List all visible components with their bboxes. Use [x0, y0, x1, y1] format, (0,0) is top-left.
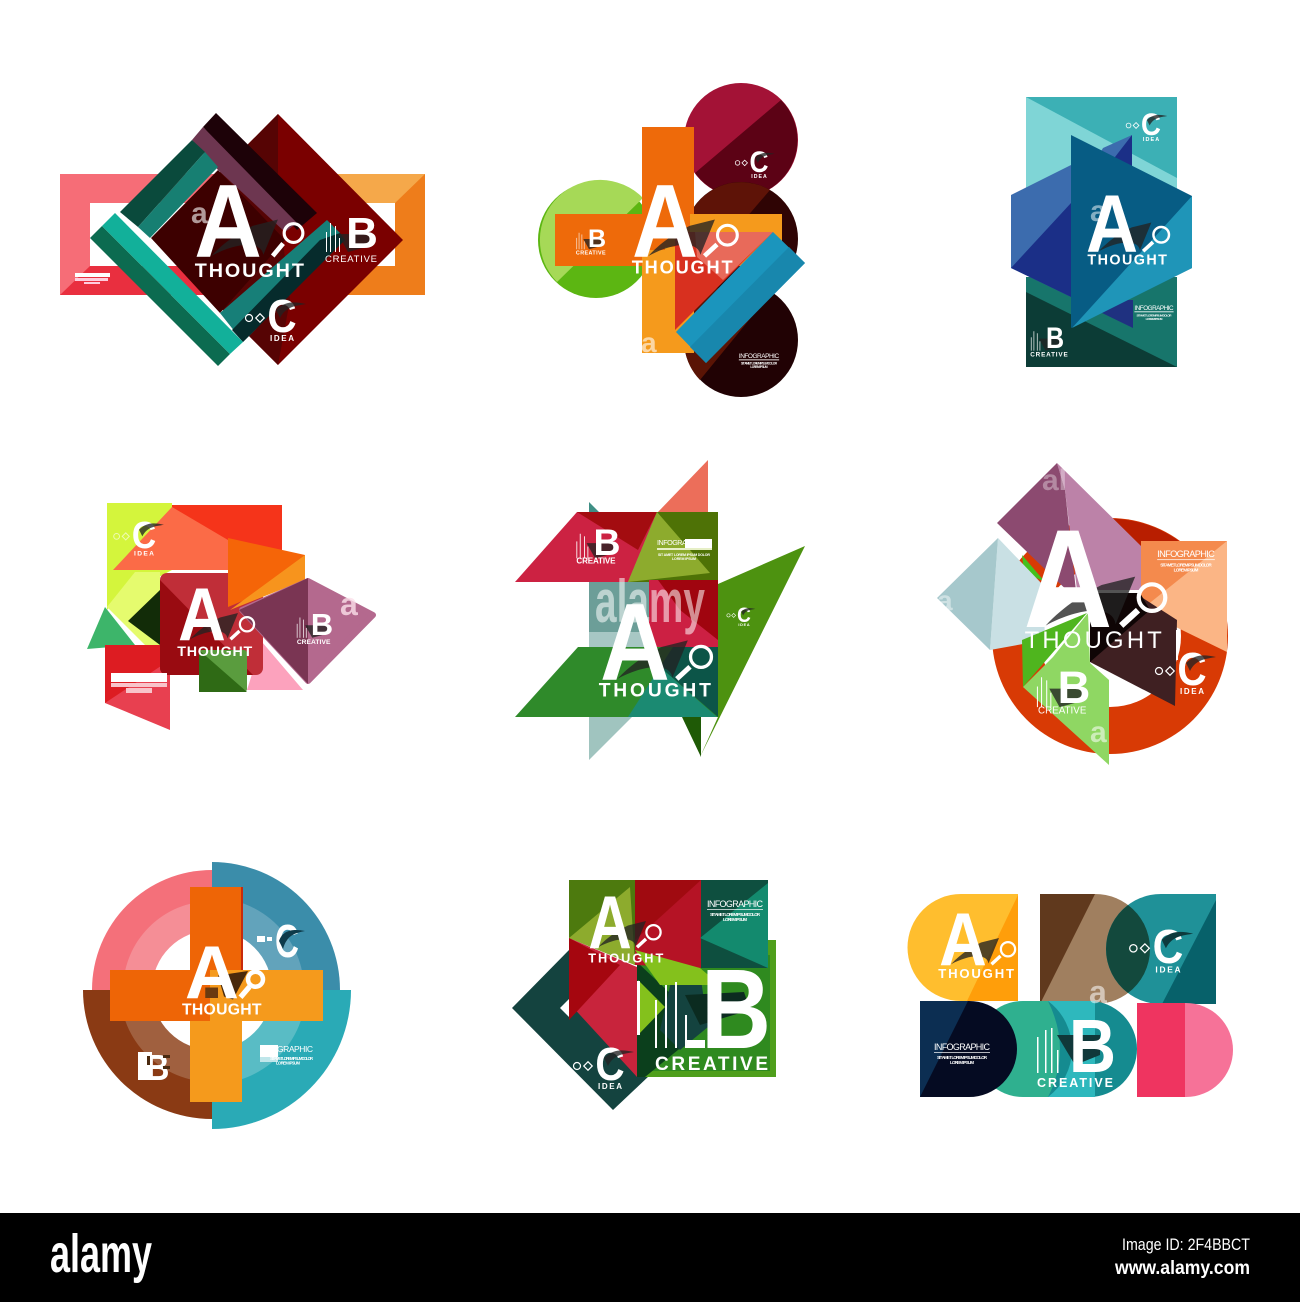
infographic text block: SIT AMET LOREM IPSUM DOLOR: [741, 361, 778, 365]
letter B with creative label: B: [588, 225, 606, 253]
letter C with idea label: IDEA: [1143, 137, 1159, 143]
white notch: [560, 999, 569, 1017]
letter C with idea label: [114, 513, 164, 557]
letter A with thought label: [588, 882, 663, 965]
infographic text block: INFOGRAPHIC: [707, 899, 764, 909]
navy tab: [920, 1001, 1017, 1097]
teal blue tab: [1048, 1001, 1137, 1097]
dark teal facet: [660, 647, 718, 717]
letter B with creative label: CREATIVE: [655, 1054, 768, 1075]
letter C with idea label: C: [1141, 107, 1161, 142]
top circle: [684, 83, 798, 197]
grey teal block: [589, 582, 649, 647]
letter A with thought label: THOUGHT: [938, 966, 1014, 981]
letter B with creative label: [1037, 662, 1090, 716]
infographic text block: [1157, 549, 1215, 572]
panel: mixed rounded shapes infographic: [87, 503, 373, 730]
infographic text block: LOREM IPSUM: [750, 365, 768, 369]
letter A with thought label: [599, 580, 711, 703]
letter B with creative label: B: [346, 209, 378, 258]
olive cell: [569, 880, 635, 965]
peach panel: [1141, 541, 1227, 652]
back small triangles: [1090, 135, 1133, 328]
letter B with creative label: CREATIVE: [576, 250, 606, 256]
brown tab: [1040, 894, 1150, 1004]
pink tab: [1137, 1003, 1233, 1097]
letter C with idea label: IDEA: [134, 550, 154, 557]
letter C with idea label: IDEA: [1155, 964, 1181, 974]
letter C with idea label: IDEA: [270, 334, 294, 343]
infographic text block: SIT AMET LOREM IPSUM DOLOR: [1160, 562, 1212, 567]
brown quadrant: [83, 990, 212, 1119]
pale blue diamond: [937, 538, 1045, 650]
letter B with creative label: [325, 209, 378, 265]
dark brown panel: [1090, 593, 1177, 706]
letter A with thought label: [177, 572, 254, 660]
letter C with idea label: C: [737, 604, 751, 627]
panel: rounded tabs infographic: [907, 894, 1233, 1097]
coral quadrant: [92, 870, 212, 990]
dark diamond frame: [512, 950, 650, 1110]
lime block: [107, 503, 172, 645]
letter A with thought label: A: [185, 930, 239, 1014]
infographic text block: LOREM IPSUM: [950, 1060, 974, 1065]
watermark letter: a: [641, 327, 657, 358]
panel: square diamonds infographic: [60, 113, 425, 366]
letter A with thought label: A: [632, 163, 698, 279]
yellow tab: [907, 894, 1018, 1001]
green lower block: [637, 940, 776, 1077]
letter C with idea label: [246, 292, 306, 343]
letter A with thought label: A: [600, 580, 670, 703]
purple diamond: [997, 463, 1141, 600]
top teal block: [1026, 97, 1177, 207]
purple rounded diamond: [239, 578, 373, 684]
small teal triangle: [589, 502, 599, 512]
letter C with idea label: IDEA: [598, 1082, 622, 1091]
red triangle: [675, 232, 773, 330]
infographic text block: SIT AMET LOREM IPSUM DOLOR: [937, 1055, 988, 1060]
letter C with idea label: C: [595, 1040, 625, 1091]
infographic text block: INFOGRAPHIC: [739, 353, 779, 360]
letter A with thought label: [1086, 179, 1169, 270]
orange rounded triangle: [228, 538, 305, 610]
letter B with creative label: [576, 521, 621, 566]
letter B with creative label: CREATIVE: [1038, 705, 1087, 716]
letter C with idea label: IDEA: [1180, 687, 1204, 696]
letter C with idea label: C: [1153, 919, 1183, 974]
letter B with creative label: [655, 946, 771, 1075]
panel: triangles and arrows infographic: [515, 460, 805, 760]
green tab: [975, 1001, 1072, 1097]
letter A with thought label: A: [939, 897, 987, 981]
panel: ring and diamonds infographic: [937, 463, 1228, 765]
main triangle: [1071, 135, 1192, 328]
infographic text block: LOREM IPSUM: [1146, 317, 1163, 321]
infographic text block: [260, 1044, 313, 1066]
middle circle: [684, 182, 798, 296]
white gap sliver: [1176, 630, 1178, 660]
letter B with creative label: [576, 225, 606, 256]
watermark letter: a: [191, 197, 208, 230]
infographic text block: SIT AMET LOREM IPSUM DOLOR: [1137, 313, 1172, 317]
orange cross: [555, 127, 782, 353]
letter A with thought label: [182, 930, 263, 1018]
infographic text block: [707, 899, 764, 922]
letter A with thought label: [1024, 501, 1165, 657]
red lower block: [105, 645, 170, 730]
website address: www.alamy.com: [1114, 1258, 1250, 1279]
letter B with creative label: [1037, 1004, 1116, 1090]
letter C with idea label: IDEA: [751, 174, 767, 180]
letter A with thought label: THOUGHT: [588, 950, 663, 965]
letter B with creative label: B: [701, 946, 771, 1072]
letter B with creative label: B: [1058, 662, 1090, 713]
letter B with creative label: CREATIVE: [297, 639, 331, 646]
letter C with idea label: [727, 604, 755, 627]
infographic text block: INFOGRAPHIC: [1134, 305, 1174, 312]
background rectangle frame: [60, 174, 425, 295]
panel: square grid infographic: [512, 880, 776, 1110]
letter C with idea label: C: [267, 292, 297, 343]
infographic text block: [1134, 305, 1174, 321]
letter B with creative label: CREATIVE: [1030, 352, 1068, 359]
panel: circles and cross infographic: [538, 83, 805, 397]
letter A with thought label: A: [178, 572, 226, 656]
pink triangle: [247, 642, 303, 690]
infographic text block: INFOGRAPHIC: [934, 1042, 990, 1052]
letter B with creative label: [297, 607, 333, 646]
letter C with idea label: C: [749, 145, 769, 178]
teal tab: [1106, 894, 1216, 1004]
infographic text block: [111, 673, 167, 693]
letter B with creative label: [1030, 321, 1068, 359]
alamy watermark: alamy: [595, 568, 705, 635]
green rounded square: [199, 650, 247, 692]
alamy logo: alamy: [50, 1224, 152, 1284]
panel: circular cross infographic: [83, 862, 351, 1129]
footer bar: [0, 1213, 1300, 1302]
watermark letter: a: [1090, 195, 1107, 228]
watermark letters: a: [937, 585, 953, 616]
letter A with thought label: THOUGHT: [599, 680, 711, 701]
letter A with thought label: A: [194, 162, 262, 279]
green arrow panel: [1022, 613, 1109, 765]
white bar: [637, 981, 640, 1035]
blue quadrant: [212, 862, 340, 990]
orange cross: [110, 887, 323, 1102]
letter C with idea label: [1126, 107, 1167, 143]
gap triangle: [695, 180, 706, 202]
letter C with idea label: [735, 145, 775, 180]
letter C with idea label: C: [1177, 645, 1207, 696]
blue diagonal strip: [676, 232, 805, 363]
infographic text block: [75, 273, 110, 284]
bottom teal block: [1026, 277, 1177, 367]
letter A with thought label: THOUGHT: [1087, 252, 1167, 268]
letter B with creative label: CREATIVE: [1037, 1076, 1113, 1090]
letter B with creative label: B: [593, 521, 621, 563]
letter A with thought label: THOUGHT: [632, 258, 733, 278]
left hexagon half: [1011, 165, 1071, 297]
white centre disc: [152, 930, 272, 1050]
infographic text block: [934, 1042, 990, 1065]
infographic text block: GRAPHIC: [277, 1044, 313, 1054]
coral triangle: [113, 507, 228, 570]
left red panel: [569, 938, 637, 1077]
green parallelogram: [515, 647, 718, 717]
letter A with thought label: A: [1024, 501, 1112, 657]
panel: hexagon infographic: [1011, 97, 1192, 367]
image id: Image ID: 2F4BBCT: [1122, 1235, 1250, 1254]
letter A with thought label: A: [588, 882, 632, 965]
green triangle: [87, 607, 135, 649]
bottom circle: [684, 283, 798, 397]
infographic text block: [739, 353, 779, 369]
infographic text block: LOREM IPSUM: [723, 917, 747, 922]
infographic text block: SIT AMET LOREM IPSUM DOLOR: [658, 553, 710, 557]
infographic text block: INFOGRAPHIC: [1157, 549, 1215, 559]
teal cell: [700, 880, 768, 968]
red left parallelogram: [515, 512, 657, 582]
watermark letters: al: [1042, 464, 1067, 497]
red rectangle: [172, 505, 282, 570]
light green band: [635, 950, 720, 985]
orange lower fill: [642, 250, 694, 353]
teal quadrant: [212, 990, 351, 1129]
salmon facet: [695, 232, 773, 280]
watermark letter: a: [1089, 974, 1107, 1010]
letter C block: C: [275, 917, 299, 967]
watermark letter: a: [340, 586, 358, 622]
red cell: [635, 880, 701, 968]
letter A with thought label: THOUGHT: [182, 1002, 262, 1019]
big green arrow: [682, 546, 805, 757]
watermark letters: a: [1090, 716, 1107, 749]
letter A with thought label: THOUGHT: [177, 644, 253, 660]
letter A with thought label: [194, 162, 304, 282]
pale lower triangle: [589, 717, 632, 760]
letter C with idea label: [1130, 919, 1193, 974]
olive block: [628, 512, 718, 582]
infographic text block: [657, 538, 712, 561]
infographic text block: SIT AMET LOREM IPSUM DOLOR: [270, 1056, 313, 1061]
red diamond: [153, 114, 403, 365]
letter B with creative label: B: [1046, 321, 1064, 354]
infographic text block: LOREM IPSUM: [1174, 567, 1199, 572]
letter B with creative label: CREATIVE: [325, 254, 377, 265]
watermark letters: [937, 464, 1107, 749]
letter C with idea label: [574, 1040, 634, 1091]
dark triangle: [128, 590, 160, 645]
red right block: [649, 580, 718, 647]
letter C with idea label: IDEA: [738, 623, 750, 627]
letter B with creative label: CREATIVE: [576, 556, 616, 565]
maroon rounded square: [160, 573, 263, 675]
letter A with thought label: [632, 163, 737, 279]
red ring: [992, 518, 1228, 754]
infographic text block: LOREM IPSUM: [276, 1060, 300, 1066]
diamond ribbon frame: [90, 113, 345, 366]
letter A with thought label: THOUGHT: [1025, 627, 1162, 654]
coral top triangle: [658, 460, 708, 512]
infographic text block: INFOGRAPHIC: [657, 538, 702, 547]
letter A with thought label: A: [1086, 179, 1138, 270]
green circle: [538, 180, 654, 298]
letter C with idea label: [1156, 645, 1216, 696]
infographic text block: LOREM IPSUM: [672, 557, 696, 561]
letter A with thought label: [938, 897, 1015, 981]
letter C with idea label: C: [132, 513, 156, 556]
teal facet: [628, 667, 717, 717]
infographic text block: SIT AMET LOREM IPSUM DOLOR: [710, 912, 761, 917]
letter B with creative label: B: [1069, 1004, 1116, 1088]
letter C block: [257, 917, 305, 967]
letter B block: B: [146, 1048, 169, 1088]
green sliver: [1022, 555, 1045, 582]
letter B with creative label: B: [311, 607, 333, 642]
letter A with thought label: THOUGHT: [195, 260, 304, 282]
